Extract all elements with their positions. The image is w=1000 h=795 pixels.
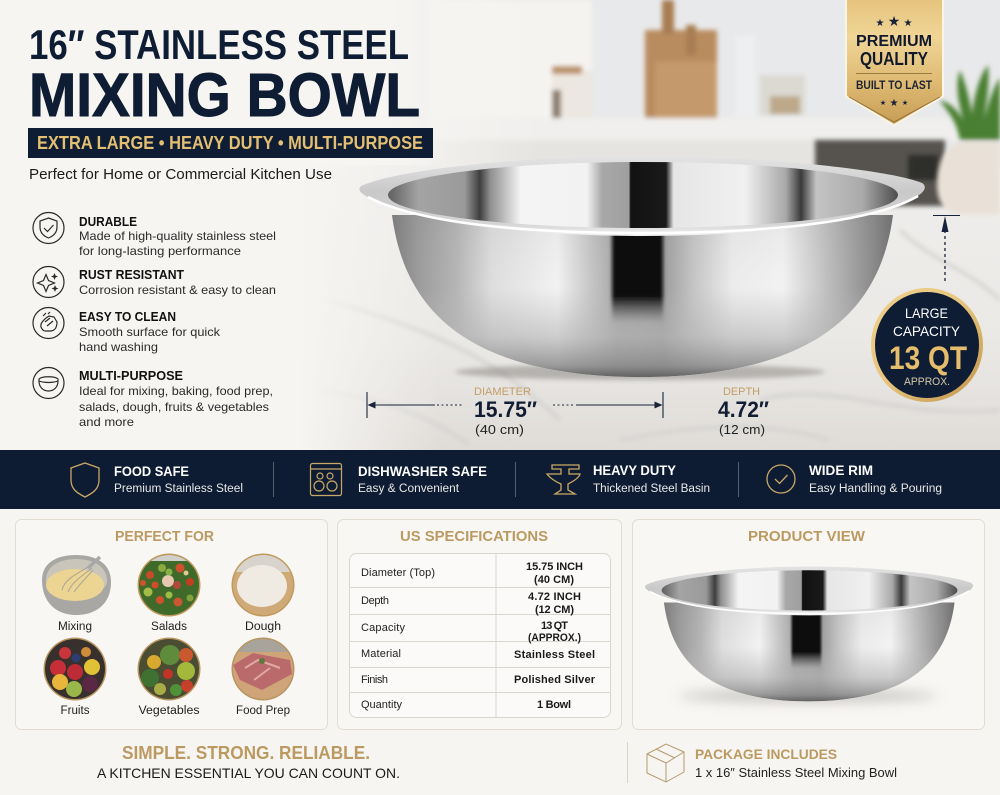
depth dimension: (12 cm) [719,422,765,437]
icon: anvil [547,465,580,494]
feature: rust resistant: RUST RESISTANT [79,267,184,282]
food: mixing [42,555,111,633]
food: dough [232,554,294,633]
band item: heavy duty: Thickened Steel Basin [593,483,710,495]
icon: washing hands [33,308,64,338]
spec table: 1 Bowl [537,699,571,711]
spec table: 15.75 INCH [526,561,583,573]
feature: rust resistant [33,266,276,298]
icon: sparkles [33,266,64,298]
icon: shield check [33,212,64,244]
panel: us specifications [338,520,622,730]
heading: PRODUCT VIEW [748,528,866,545]
package includes [627,742,897,783]
title [29,21,420,129]
feature: multi-purpose: and more [79,415,134,429]
spec table: Diameter (Top) [361,567,435,579]
spec table: (APPROX.) [528,632,581,644]
spec table: 4.72 INCH [528,591,581,603]
premium quality ribbon badge: ★ [880,99,886,107]
package includes: PACKAGE INCLUDES [695,746,837,762]
band item: dishwasher safe [310,463,487,496]
band item: food safe: Premium Stainless Steel [114,483,243,495]
premium quality ribbon badge: PREMIUM [856,33,932,50]
large capacity badge: APPROX. [904,376,950,388]
heading: US SPECIFICATIONS [400,528,548,545]
band item: dishwasher safe: Easy & Convenient [358,483,460,495]
icon: shield [71,463,99,497]
spec table: Capacity [361,622,406,634]
feature: easy to clean [33,308,221,354]
feature: easy to clean: hand washing [79,340,158,354]
slogan: SIMPLE. STRONG. RELIABLE. [122,743,370,763]
feature: multi-purpose [33,368,273,429]
subtitle: Perfect for Home or Commercial Kitchen Use [29,166,332,183]
food: fruits: Fruits [60,705,90,717]
icon: check circle [767,465,795,493]
band item: wide rim: Easy Handling & Pouring [809,483,942,495]
food: vegetables [138,638,200,717]
slogan [97,743,400,781]
tagline banner: EXTRA LARGE • HEAVY DUTY • MULTI-PURPOSE [37,133,423,153]
premium quality ribbon badge: ★ [902,99,908,107]
premium quality ribbon badge: BUILT TO LAST [856,78,933,92]
spec table: Depth [361,595,389,607]
feature: multi-purpose: Ideal for mixing, baking, food prep, [79,384,273,398]
slogan: A KITCHEN ESSENTIAL YOU CAN COUNT ON. [97,765,400,781]
food: dough: Dough [245,621,281,633]
heading: PERFECT FOR [115,528,214,545]
package includes: 1 x 16″ Stainless Steel Mixing Bowl [695,765,897,780]
depth dimension: 4.72″ [718,397,769,422]
feature: durable [33,212,276,258]
premium quality ribbon badge: QUALITY [860,49,928,69]
feature: durable: Made of high-quality stainless steel [79,229,276,243]
premium quality ribbon badge: ★ [876,18,885,29]
large capacity badge: CAPACITY [893,323,961,339]
feature: durable: for long-lasting performance [79,244,241,258]
product bowl [645,567,973,703]
food: vegetables: Vegetables [138,705,200,717]
large capacity badge: 13 QT [889,340,967,376]
feature: easy to clean: EASY TO CLEAN [79,309,176,324]
spec table: Finish [361,674,388,686]
depth dimension: DEPTH [723,386,760,398]
large capacity badge: LARGE [905,305,948,321]
spec table: 13 QT [541,620,568,632]
icon: bowl [33,368,64,398]
food: salads [138,554,200,633]
diameter dimension: (40 cm) [475,422,524,437]
spec table: Polished Silver [514,674,596,686]
large capacity badge [871,288,983,402]
panel: product view [632,520,984,730]
band item: dishwasher safe: DISHWASHER SAFE [358,463,487,479]
hero photo background: blurred kitchen and marble [0,0,1000,450]
food: salads: Salads [151,621,187,633]
features band [0,450,1000,509]
arrow: diameter [367,392,663,418]
icon: dishwasher [310,464,342,496]
title: 16″ STAINLESS STEEL [29,21,409,68]
diameter dimension [367,386,663,437]
band item: heavy duty [547,462,710,495]
diameter dimension: 15.75″ [474,397,537,422]
band item: heavy duty: HEAVY DUTY [593,462,677,478]
depth dimension [718,386,769,437]
premium quality ribbon badge: ★ [904,18,913,29]
feature: multi-purpose: salads, dough, fruits & vegetables [79,400,269,414]
band item: food safe: FOOD SAFE [114,463,189,479]
panel: perfect for [16,520,328,730]
spec table: Quantity [361,699,402,711]
spec table: Material [361,648,401,660]
icon: box [647,744,684,782]
premium quality ribbon badge [845,0,944,126]
feature: easy to clean: Smooth surface for quick [79,325,221,339]
main bowl photo [359,156,925,380]
premium quality ribbon badge: ★ [890,98,899,109]
food: mixing: Mixing [58,621,92,633]
band item: wide rim: WIDE RIM [809,462,873,478]
food: food prep: Food Prep [236,705,290,717]
band item: food safe [71,463,243,497]
tagline banner [28,128,433,158]
feature: rust resistant: Corrosion resistant & easy to clean [79,283,276,297]
food: fruits [44,638,106,717]
spec table [350,554,610,718]
spec table: (40 CM) [534,574,574,586]
diameter dimension: DIAMETER [474,386,531,398]
band item: wide rim [767,462,942,495]
premium quality ribbon badge: ★ [888,13,900,29]
title: MIXING BOWL [29,61,420,129]
spec table: Stainless Steel [514,649,595,661]
depth arrow [933,216,960,281]
feature: durable: DURABLE [79,214,137,229]
feature: multi-purpose: MULTI-PURPOSE [79,368,183,383]
food: food prep [232,638,294,717]
spec table: (12 CM) [535,604,574,616]
